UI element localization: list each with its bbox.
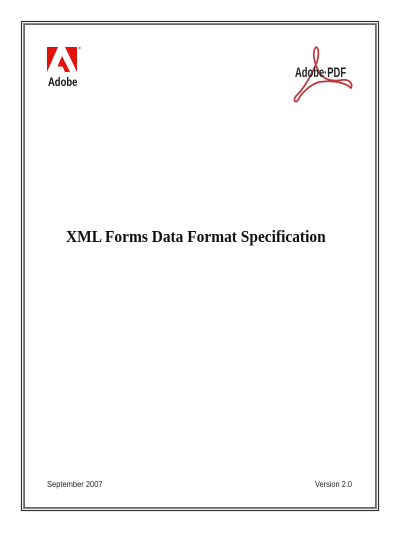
footer: date: September 2007 [47,479,103,489]
logo text Adobe PDF: Adobe·PDF [295,64,346,80]
logo: Adobe [47,46,81,89]
title: XML Forms Data Format Specification [66,227,326,246]
logo wordmark: Adobe [48,77,77,89]
icon: red PDF swirl [294,46,352,102]
logo: Adobe PDF [294,46,352,102]
icon: Adobe red A mark [47,46,81,72]
footer: version: Version 2.0 [315,479,352,489]
